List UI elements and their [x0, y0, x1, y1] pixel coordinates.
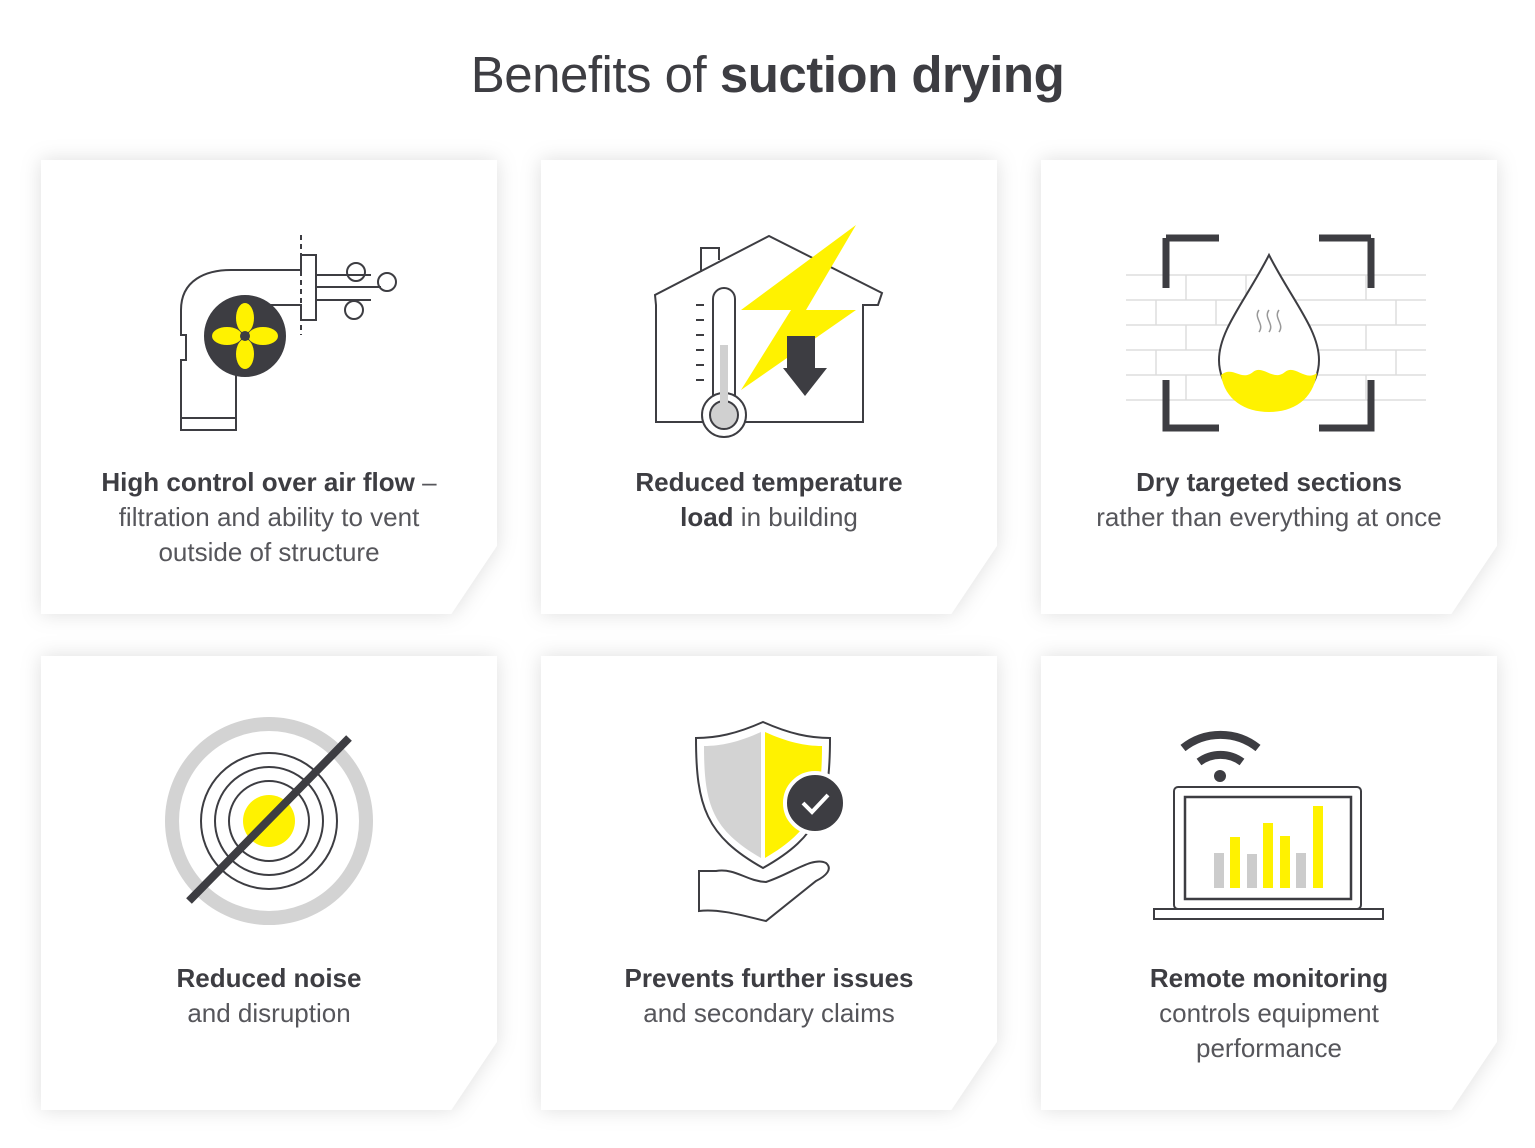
text: and disruption [187, 998, 351, 1028]
text [101, 467, 437, 567]
panel: temperature [534, 154, 1004, 620]
text [1096, 467, 1442, 532]
panel: air flow [34, 154, 504, 620]
text: Remote monitoring [1150, 963, 1388, 993]
text [624, 963, 914, 1028]
text: controls equipment [1159, 998, 1379, 1028]
text: outside of structure [158, 537, 380, 567]
panel: prevents [534, 650, 1004, 1116]
text: Prevents further issues [624, 963, 914, 993]
title: Benefits of suction drying [471, 46, 1064, 103]
panel: targeted [1034, 154, 1504, 620]
text: filtration and ability to vent [119, 502, 419, 532]
icon: muted speaker [165, 717, 373, 925]
icon: house thermometer lightning [654, 225, 884, 438]
text: load in building [680, 502, 858, 532]
text: Reduced temperature [635, 467, 903, 497]
panel: remote [1034, 650, 1504, 1116]
text [635, 467, 903, 532]
text: Dry targeted sections [1136, 467, 1402, 497]
text: Reduced noise [177, 963, 361, 993]
text [177, 963, 361, 1028]
text: and secondary claims [643, 998, 895, 1028]
text: performance [1196, 1033, 1342, 1063]
text: High control over air flow – [101, 467, 437, 497]
text [1150, 963, 1388, 1063]
panel: noise [34, 650, 504, 1116]
text: rather than everything at once [1096, 502, 1442, 532]
icon: laptop wifi chart [1153, 730, 1384, 920]
icon: fan pipe [180, 235, 397, 431]
icon: shield hand [695, 720, 843, 922]
icon: water drop on brick wall [1126, 234, 1426, 432]
